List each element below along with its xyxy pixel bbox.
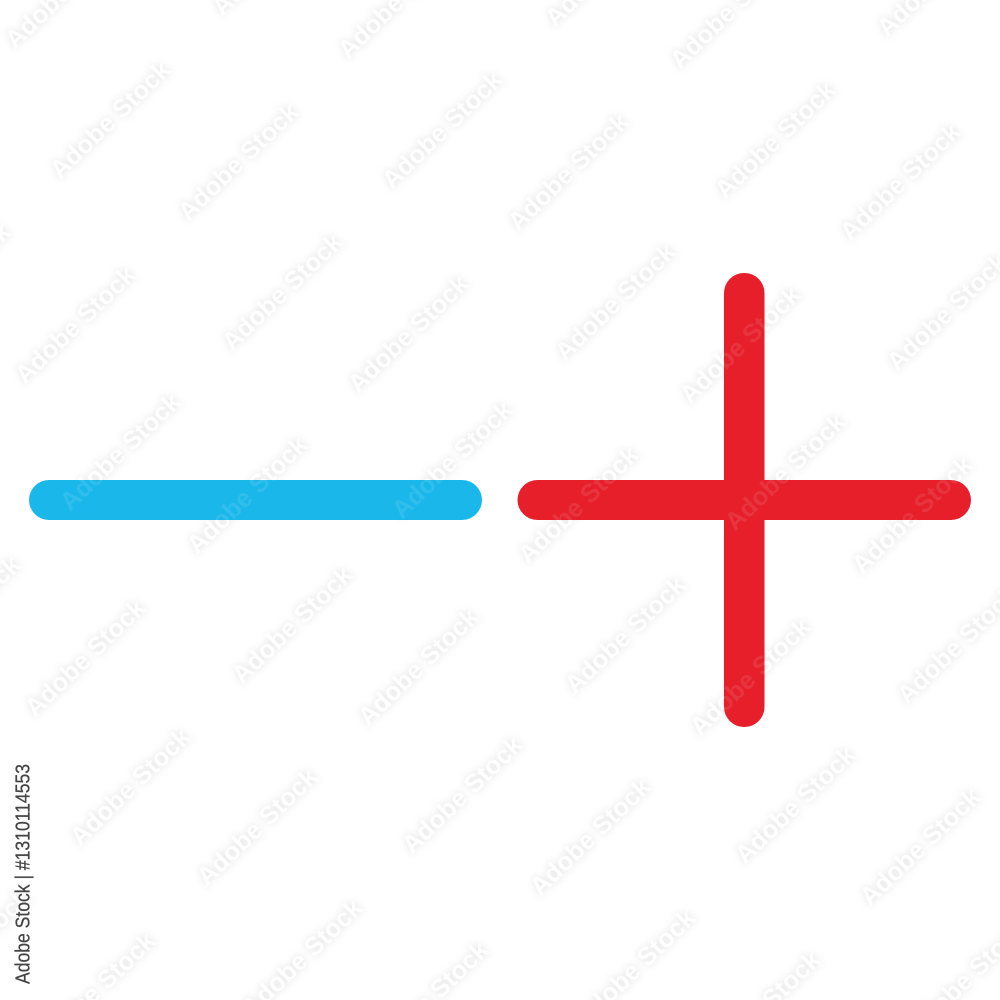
watermark over icons: Adobe Stock [685,612,817,741]
icon: blue minus sign [29,480,482,520]
icon: red plus sign [518,273,971,727]
watermark pattern: Adobe Stock [675,280,807,409]
watermark pattern: Adobe Stock [397,730,529,859]
watermark pattern: Adobe Stock [20,593,152,722]
stock image credit: Adobe Stock | #1310114553 [12,764,34,984]
watermark over icons [55,280,979,741]
watermark pattern: Adobe Stock [45,55,177,184]
watermark pattern: Adobe Stock [730,740,862,869]
watermark pattern: Adobe Stock [855,782,987,911]
watermark pattern: Adobe Stock [560,570,692,699]
watermark pattern: Adobe Stock [227,560,359,689]
watermark pattern: Adobe Stock [192,762,324,891]
watermark over icons: Adobe Stock [182,430,314,559]
watermark pattern: Adobe Stock [550,237,682,366]
watermark over icons: Adobe Stock [720,407,852,536]
watermark over icons: Adobe Stock [847,450,979,579]
watermark pattern: Adobe Stock [10,260,142,389]
watermark over icons: Adobe Stock [387,395,519,524]
watermark pattern: Adobe Stock [503,107,635,236]
watermark pattern: Adobe Stock [353,602,485,731]
watermark over icons: Adobe Stock [55,387,187,516]
watermark pattern: Adobe Stock [525,772,657,901]
watermark pattern: Adobe Stock [835,117,967,246]
watermark pattern: Adobe Stock [720,407,852,536]
watermark pattern: Adobe Stock [710,75,842,204]
watermark pattern: Adobe Stock [377,65,509,194]
watermark pattern: Adobe Stock [847,450,979,579]
watermark pattern: Adobe Stock [55,387,187,516]
watermark pattern: Adobe Stock [513,440,645,569]
watermark over icons: Adobe Stock [675,280,807,409]
watermark pattern: Adobe Stock [387,395,519,524]
watermark pattern: Adobe Stock [685,612,817,741]
watermark pattern: Adobe Stock [343,269,475,398]
watermark pattern: Adobe Stock [217,227,349,356]
watermark pattern: Adobe Stock [173,97,305,226]
watermark over icons: Adobe Stock [513,440,645,569]
watermark pattern: Adobe Stock [182,430,314,559]
watermark pattern: Adobe Stock [65,722,197,851]
